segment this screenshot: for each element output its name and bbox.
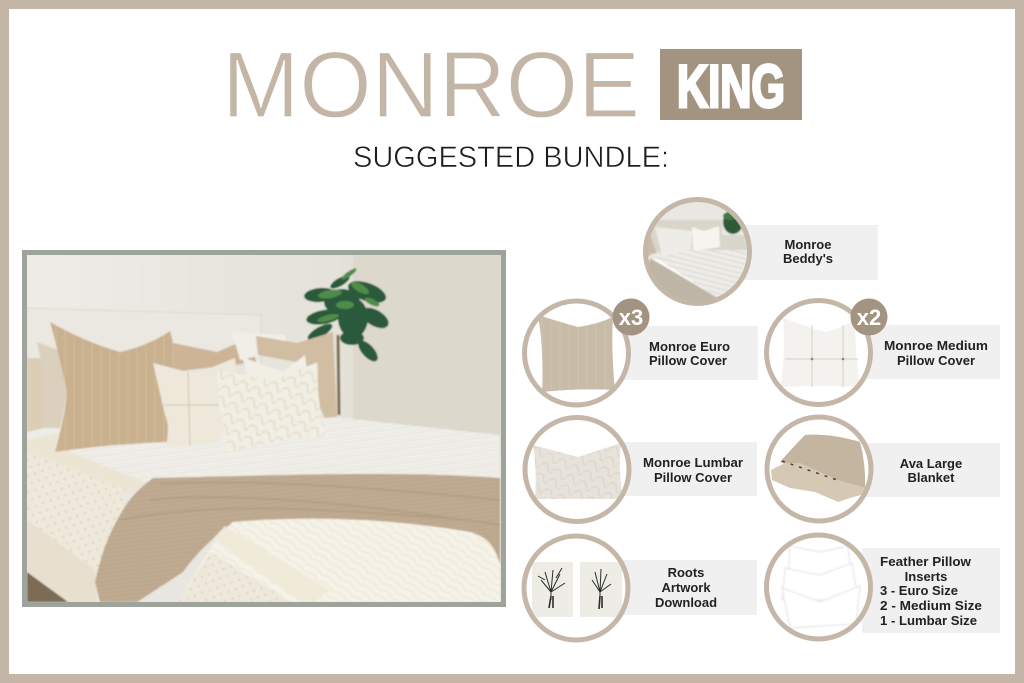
item: Monroe Lumbar Pillow Cover xyxy=(525,418,757,522)
quantity badge x3: x3 xyxy=(619,305,643,330)
headboard xyxy=(27,308,188,358)
thumbnail: artwork prints xyxy=(532,562,622,617)
thumbnail: lumbar pillow xyxy=(533,443,623,499)
thumbnail: blanket xyxy=(771,435,868,502)
title: Monroe: MONROE xyxy=(222,32,640,137)
back pillows xyxy=(172,342,256,372)
item: Feather Pillow Inserts xyxy=(766,535,1000,639)
item: Monroe Euro Pillow Cover: Monroe Euro xyxy=(649,339,730,354)
item: Ava Large Blanket: Ava Large xyxy=(900,456,962,471)
item: Monroe Medium Pillow Cover: Monroe Medium xyxy=(884,338,988,353)
item: Monroe Medium Pillow Cover: Pillow Cover xyxy=(897,353,975,368)
item: Monroe Euro Pillow Cover xyxy=(524,298,758,405)
item: Monroe Lumbar Pillow Cover: Monroe Lumbar xyxy=(643,455,743,470)
item: Roots Artwork Download: Roots xyxy=(668,565,704,580)
item: Feather Pillow Inserts: 3 - Euro Size xyxy=(880,583,958,598)
quantity badge x2: x2 xyxy=(857,305,881,330)
thumbnail: medium pillow xyxy=(780,318,860,387)
quantity badge x2 xyxy=(850,298,888,336)
item: Feather Pillow Inserts: 1 - Lumbar Size xyxy=(880,613,977,628)
size tag: King: KING xyxy=(677,53,785,120)
item: Monroe Beddy's xyxy=(640,197,878,310)
subtitle: SUGGESTED BUNDLE: xyxy=(353,141,669,174)
mattress side xyxy=(27,452,130,592)
item: Monroe Euro Pillow Cover: Pillow Cover xyxy=(649,353,727,368)
quantity badge x3 xyxy=(612,298,650,336)
item: Roots Artwork Download: Artwork xyxy=(661,580,711,595)
item: Monroe Beddy's: Monroe xyxy=(785,237,831,252)
euro pillow xyxy=(50,322,174,452)
thumbnail: bedding xyxy=(648,202,747,301)
blanket xyxy=(95,474,500,602)
plant xyxy=(303,267,392,415)
item: Monroe Lumbar Pillow Cover: Pillow Cover xyxy=(654,470,732,485)
lumbar pillow xyxy=(217,362,326,453)
item: Ava Large Blanket: Blanket xyxy=(908,470,955,485)
item: Roots Artwork Download xyxy=(524,536,757,640)
thumbnail: pillow inserts xyxy=(782,546,860,628)
item: Feather Pillow Inserts: Feather Pillow xyxy=(880,554,972,569)
item: Monroe Beddy's: Beddy's xyxy=(783,251,833,266)
thumbnail: euro pillow xyxy=(538,315,615,392)
medium pillow xyxy=(153,358,237,448)
item: Ava Large Blanket xyxy=(767,417,1000,521)
side pillows and base xyxy=(27,358,46,432)
item: Monroe Medium Pillow Cover xyxy=(766,298,1000,404)
quilt top xyxy=(62,417,500,490)
item: Roots Artwork Download: Download xyxy=(655,595,717,610)
item: Feather Pillow Inserts: 2 - Medium Size xyxy=(880,598,982,613)
item: Feather Pillow Inserts: Inserts xyxy=(905,569,947,584)
photo: styled bed xyxy=(24,252,504,604)
